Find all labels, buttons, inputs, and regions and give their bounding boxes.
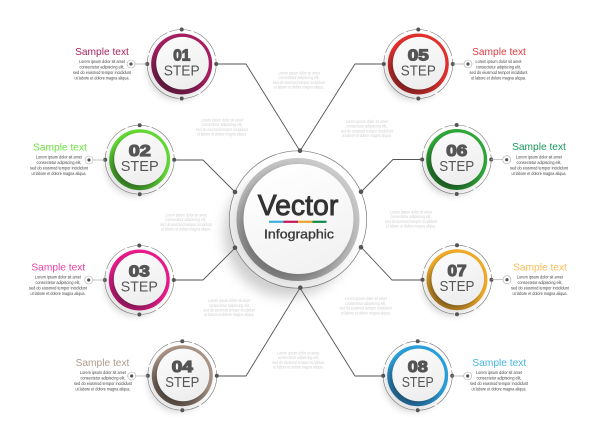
central subtitle: Infographic bbox=[264, 227, 335, 242]
connector lines bbox=[174, 64, 422, 376]
grey note: upper right: consectetur adipiscing elit, bbox=[346, 124, 387, 128]
step 01 label bbox=[73, 47, 132, 81]
step 06 label: consectetur adipiscing elit, bbox=[516, 160, 562, 165]
step 02 bbox=[30, 123, 176, 196]
step 02 label: sed do eiusmod tempor incididunt bbox=[30, 166, 89, 171]
grey note: lower right: ut labore et dolore magna aliqua. bbox=[341, 310, 391, 316]
step 05 bbox=[382, 28, 528, 100]
step 04: 04 bbox=[172, 359, 193, 376]
grey note: upper right bbox=[341, 119, 393, 138]
step 07 label: Sample text bbox=[513, 262, 567, 274]
grey note: bottom centre: sed do eiusmod tempor incididunt bbox=[272, 360, 325, 365]
step 02 label: Lorem ipsum dolor sit amet bbox=[36, 154, 83, 160]
step 06: 06 bbox=[446, 143, 468, 160]
grey note: upper right: Lorem ipsum dolor sit amet bbox=[346, 119, 388, 124]
grey note: middle right: sed do eiusmod tempor incididunt bbox=[385, 219, 438, 224]
step 01 bbox=[73, 28, 218, 100]
step 04 label: consectetur adipiscing elit, bbox=[80, 376, 126, 380]
grey note: upper left: Lorem ipsum dolor sit amet bbox=[201, 118, 244, 122]
grey note: bottom centre bbox=[272, 350, 325, 370]
step 03 bbox=[29, 244, 176, 316]
grey note: lower right: consectetur adipiscing elit, bbox=[345, 301, 386, 306]
step 05 label bbox=[470, 47, 528, 81]
grey note: lower left: Lorem ipsum dolor sit amet bbox=[208, 298, 251, 303]
step 05 label: sed do eiusmod tempor incididunt bbox=[470, 70, 528, 75]
step 07: STEP bbox=[440, 278, 474, 295]
step 04 bbox=[74, 339, 219, 412]
step 06 label: sed do eiusmod tempor incididunt bbox=[510, 166, 569, 171]
step 03 label: sed do eiusmod tempor incididunt bbox=[29, 286, 88, 291]
step 01 label: ut labore et dolore magna aliqua. bbox=[74, 76, 130, 81]
step 02 label: Sample text bbox=[33, 142, 87, 154]
grey note: bottom centre: Lorem ipsum dolor sit amet bbox=[277, 350, 320, 356]
step 05: STEP bbox=[401, 62, 436, 80]
step 07 label: Lorem ipsum dolor sit amet bbox=[517, 274, 564, 280]
step 03 label bbox=[29, 262, 88, 296]
step 01 label: sed do eiusmod tempor incididunt bbox=[73, 70, 132, 75]
grey note: upper right: ut labore et dolore magna aliqua. bbox=[342, 133, 392, 138]
step 05: 05 bbox=[408, 48, 429, 64]
step 03 label: consectetur adipiscing elit, bbox=[36, 280, 80, 285]
colour bar bbox=[269, 221, 326, 223]
step 02: STEP bbox=[121, 158, 159, 175]
grey note: top centre: ut labore et dolore magna aliqua. bbox=[274, 85, 324, 90]
grey note: bottom centre: ut labore et dolore magna aliqua. bbox=[273, 364, 323, 370]
step 06 bbox=[420, 123, 569, 196]
step 05 label: Lorem ipsum dolor sit amet bbox=[476, 59, 522, 64]
grey note: top centre: Lorem ipsum dolor sit amet bbox=[278, 70, 321, 76]
step 02: 02 bbox=[129, 143, 151, 160]
step 04 label: sed do eiusmod tempor incididunt bbox=[74, 381, 133, 386]
step 03 label: Sample text bbox=[31, 262, 85, 274]
central node dots bbox=[233, 148, 363, 290]
step 07 label: ut labore et dolore magna aliqua. bbox=[512, 291, 568, 296]
grey note: upper left: sed do eiusmod tempor incididunt bbox=[196, 127, 249, 132]
step 04 label: Lorem ipsum dolor sit amet bbox=[80, 370, 127, 375]
step 08 label: Lorem ipsum dolor sit amet bbox=[476, 370, 523, 375]
step 07: 07 bbox=[448, 263, 466, 280]
step 08: 08 bbox=[408, 359, 428, 376]
grey note: lower right: Lorem ipsum dolor sit amet bbox=[345, 296, 387, 301]
step 08 label: ut labore et dolore magna aliqua. bbox=[472, 387, 526, 392]
step 06: STEP bbox=[439, 158, 474, 175]
grey note: lower right bbox=[340, 296, 392, 316]
step 07 bbox=[420, 243, 570, 316]
step 02 label: ut labore et dolore magna aliqua. bbox=[32, 171, 86, 176]
grey note: middle right: ut labore et dolore magna aliqua. bbox=[386, 224, 436, 229]
grey note: middle right: consectetur adipiscing elit, bbox=[390, 214, 432, 219]
step 04 label: ut labore et dolore magna aliqua. bbox=[76, 387, 130, 392]
grey note: lower right: sed do eiusmod tempor incididunt bbox=[340, 306, 392, 310]
step 03 label: Lorem ipsum dolor sit amet bbox=[35, 274, 82, 280]
grey note: middle left: consectetur adipiscing elit, bbox=[166, 217, 206, 222]
grey note: middle right: Lorem ipsum dolor sit amet bbox=[390, 210, 433, 214]
grey note: upper right: sed do eiusmod tempor incididunt bbox=[341, 128, 393, 133]
grey note: lower left bbox=[203, 298, 256, 317]
step 06 label bbox=[510, 142, 569, 176]
grey note: upper left bbox=[196, 118, 249, 137]
step 01 label: consectetur adipiscing elit, bbox=[80, 64, 124, 70]
step 03: 03 bbox=[129, 264, 150, 280]
step 03 label: ut labore et dolore magna aliqua. bbox=[30, 291, 86, 296]
grey note: middle left: Lorem ipsum dolor sit amet bbox=[165, 212, 208, 218]
step 03: STEP bbox=[121, 278, 158, 296]
step 08 label: Sample text bbox=[472, 358, 526, 369]
step 06 label: ut labore et dolore magna aliqua. bbox=[512, 171, 566, 176]
step 04 label bbox=[74, 358, 133, 392]
grey note: bottom centre: consectetur adipiscing elit, bbox=[278, 355, 319, 360]
step 04 label: Sample text bbox=[76, 358, 130, 369]
step 01: 01 bbox=[173, 48, 191, 64]
step 01: STEP bbox=[164, 62, 200, 80]
step 08 bbox=[381, 339, 529, 412]
grey note: middle left: ut labore et dolore magna aliqua. bbox=[161, 227, 211, 232]
step 05 label: ut labore et dolore magna aliqua. bbox=[471, 76, 526, 81]
step 04: STEP bbox=[165, 374, 199, 391]
step 01 label: Lorem ipsum dolor sit amet bbox=[79, 59, 126, 64]
central circle bbox=[224, 148, 367, 297]
grey note: middle right bbox=[385, 210, 438, 229]
step 01 label: Sample text bbox=[75, 47, 129, 58]
step 06 label: Lorem ipsum dolor sit amet bbox=[516, 154, 563, 160]
step 08: STEP bbox=[402, 374, 434, 391]
step 07 label: sed do eiusmod tempor incididunt bbox=[511, 286, 570, 291]
step 07 label bbox=[511, 262, 570, 296]
step 05 label: consectetur adipiscing elit, bbox=[476, 64, 521, 70]
grey note: top centre bbox=[273, 70, 326, 90]
step 08 label: consectetur adipiscing elit, bbox=[476, 376, 522, 380]
step 05 label: Sample text bbox=[472, 47, 526, 58]
step 08 label bbox=[470, 358, 529, 392]
step 06 label: Sample text bbox=[512, 142, 566, 153]
grey note: lower left: sed do eiusmod tempor incididunt bbox=[203, 308, 256, 312]
grey note: top centre: consectetur adipiscing elit, bbox=[278, 75, 320, 80]
central title: Vector bbox=[258, 190, 339, 222]
step 08 label: sed do eiusmod tempor incididunt bbox=[470, 381, 529, 386]
grey note: top centre: sed do eiusmod tempor incididunt bbox=[273, 80, 326, 85]
grey note: middle left bbox=[160, 212, 213, 232]
step 02 label: consectetur adipiscing elit, bbox=[36, 160, 82, 165]
grey note: upper left: consectetur adipiscing elit, bbox=[202, 122, 242, 127]
grey note: lower left: consectetur adipiscing elit, bbox=[209, 303, 250, 308]
grey note: middle left: sed do eiusmod tempor incididunt bbox=[160, 222, 213, 227]
step 07 label: consectetur adipiscing elit, bbox=[518, 280, 562, 285]
step 02 label bbox=[30, 142, 89, 176]
grey note: lower left: ut labore et dolore magna aliqua. bbox=[204, 312, 254, 317]
grey note: upper left: ut labore et dolore magna aliqua. bbox=[197, 132, 247, 137]
